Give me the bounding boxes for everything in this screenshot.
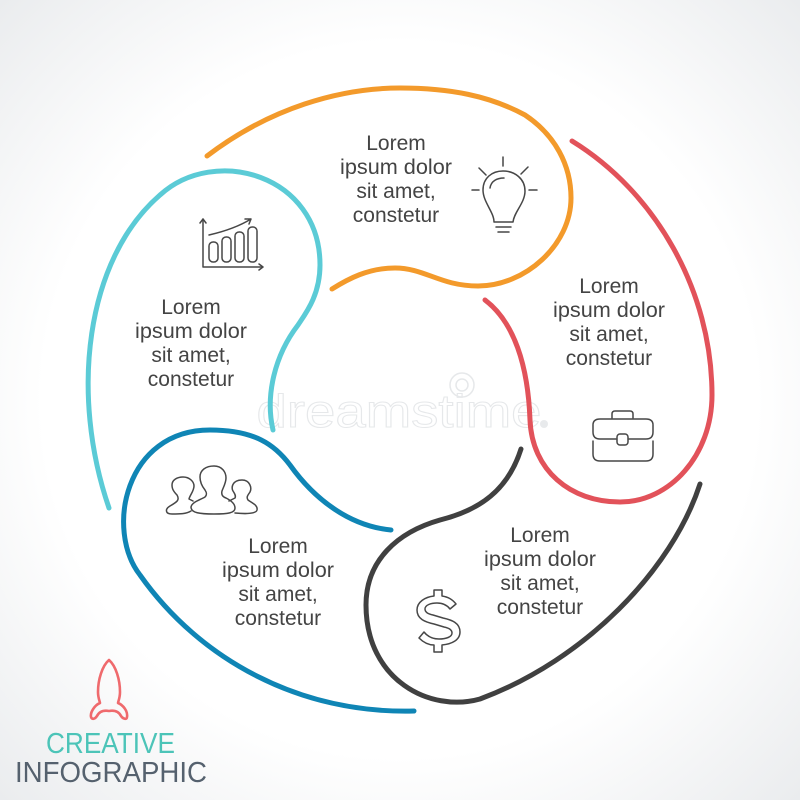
text: dark section (484, 524, 596, 619)
text: cyan section: ipsum dolor (135, 320, 247, 343)
text: dark section: sit amet, (500, 572, 580, 595)
orange loop (207, 88, 571, 289)
text: red section: sit amet, (569, 323, 649, 346)
cyan loop (88, 171, 320, 508)
brand: infographic: INFOGRAPHIC (15, 757, 207, 789)
text: cyan section: constetur (148, 368, 234, 391)
icon: bar chart (200, 219, 263, 270)
icon: people (166, 466, 257, 514)
text: cyan section: Lorem (161, 296, 221, 319)
text: cyan section: sit amet, (151, 344, 231, 367)
blue loop (124, 430, 414, 711)
brand: creative: CREATIVE (46, 728, 175, 760)
icon: light bulb (472, 157, 537, 232)
text: dark section: Lorem (510, 524, 570, 547)
text: orange section (340, 132, 452, 227)
text: orange section: Lorem (366, 132, 426, 155)
text: red section: constetur (566, 347, 652, 370)
text: red section: ipsum dolor (553, 299, 665, 322)
watermark (256, 373, 548, 437)
text: blue section: sit amet, (238, 583, 318, 606)
text: orange section: constetur (353, 204, 439, 227)
text: dark section: ipsum dolor (484, 548, 596, 571)
watermark: dreamstime (256, 385, 542, 437)
text: orange section: sit amet, (356, 180, 436, 203)
text: blue section: Lorem (248, 535, 308, 558)
text: blue section: ipsum dolor (222, 559, 334, 582)
text: orange section: ipsum dolor (340, 156, 452, 179)
text: blue section (222, 535, 334, 630)
text: cyan section (135, 296, 247, 391)
text: red section (553, 275, 665, 370)
text: blue section: constetur (235, 607, 321, 630)
text: red section: Lorem (579, 275, 639, 298)
icon: rocket (91, 660, 127, 719)
icon: dollar sign (417, 590, 460, 652)
text: dark section: constetur (497, 596, 583, 619)
icon: briefcase (593, 411, 653, 461)
dark loop (366, 449, 700, 702)
red loop (485, 141, 712, 502)
